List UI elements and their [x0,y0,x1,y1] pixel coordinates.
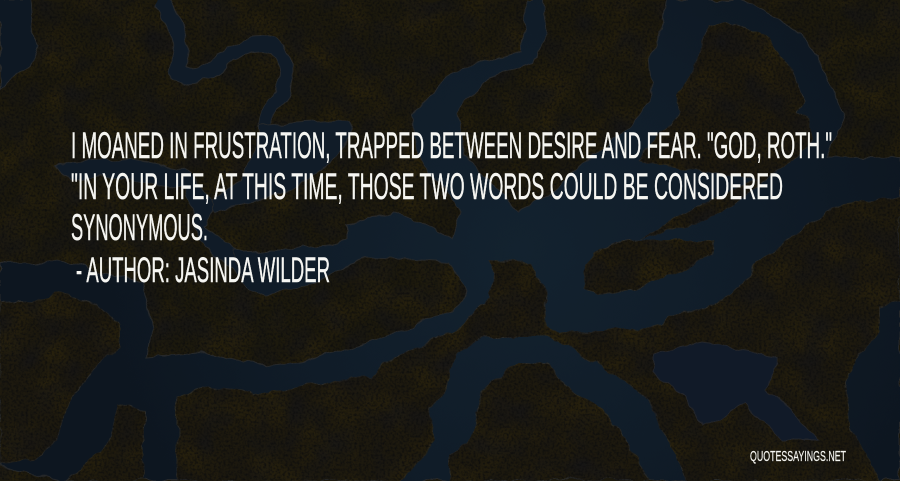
quote text [71,125,832,248]
land: oxbow island [637,22,813,238]
lake in the eastern land [653,343,817,440]
land: islet [67,403,143,481]
author attribution: - AUTHOR: JASINDA WILDER [76,251,330,290]
quote text: SYNONYMOUS. [71,207,208,248]
land: left island [0,293,120,463]
land: southern island [450,363,647,481]
land: southern mainland [177,197,900,481]
land: central spit [583,240,713,295]
